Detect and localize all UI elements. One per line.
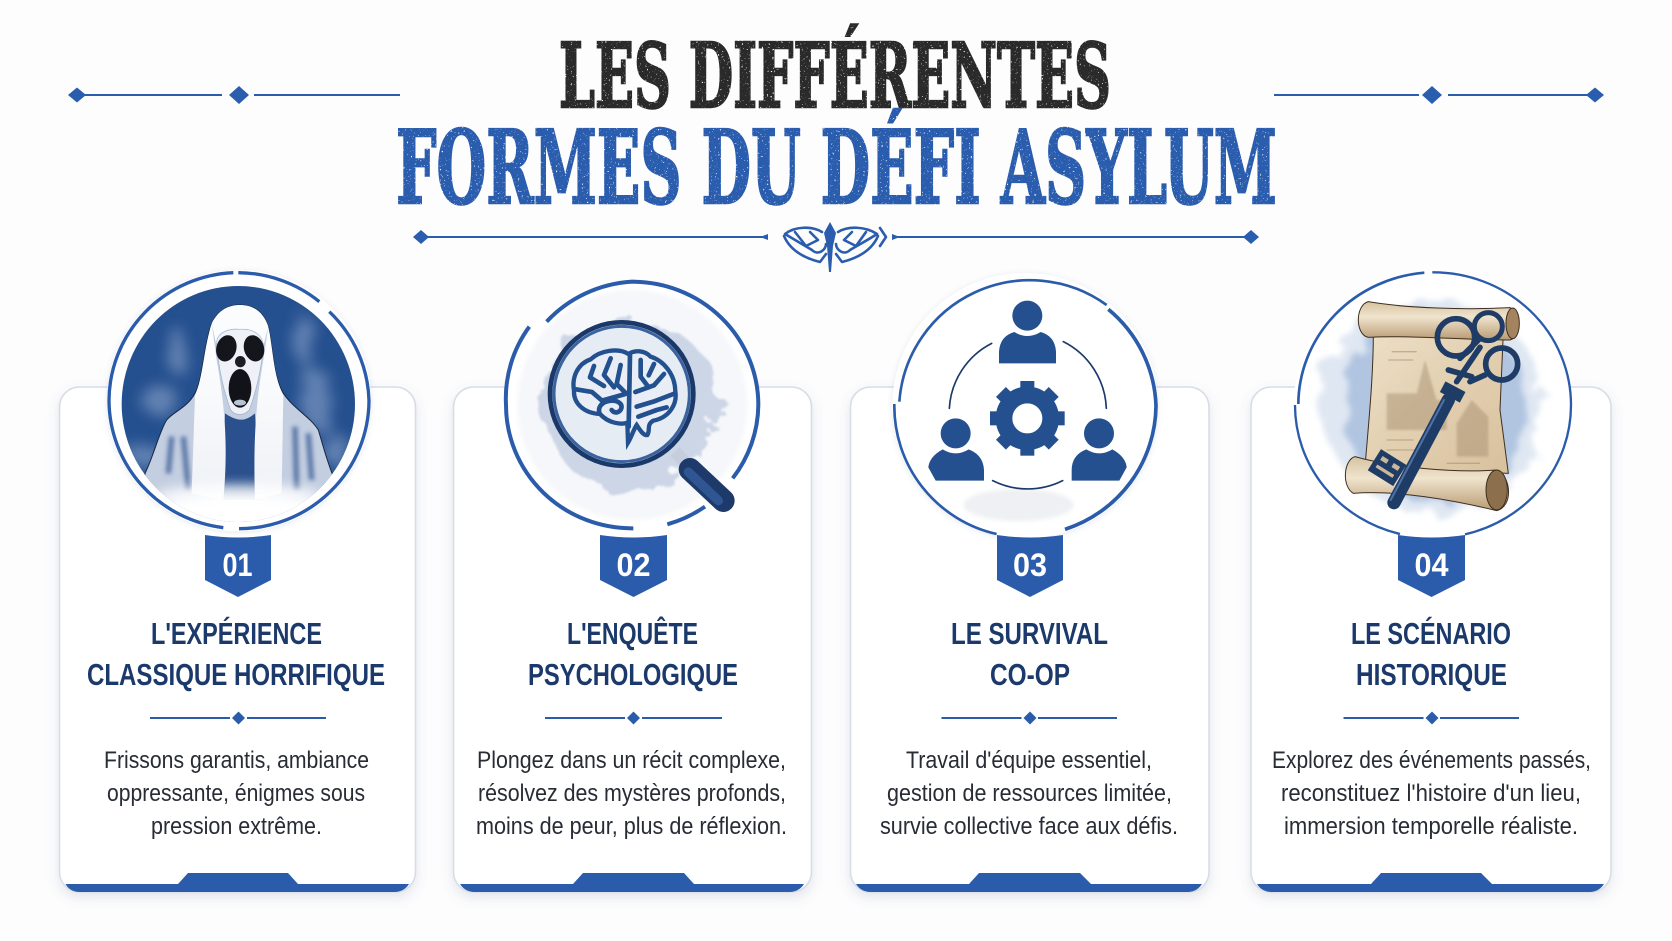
- badge 01: [205, 535, 271, 597]
- card 2: [454, 387, 812, 892]
- card 1 description: oppressante, énigmes sous: [107, 780, 365, 807]
- card 4 heading: LE SCÉNARIO: [1351, 616, 1511, 651]
- key: [1391, 313, 1518, 503]
- card 2 description: moins de peur, plus de réflexion.: [476, 813, 787, 840]
- magnifier handle: [675, 452, 723, 501]
- card 4 description: [1272, 747, 1591, 840]
- badge 01: 01: [222, 547, 252, 583]
- card 4 description: reconstituez l'histoire d'un lieu,: [1281, 780, 1581, 807]
- card 3 divider: [942, 712, 1117, 724]
- ghost sleeves: [145, 305, 333, 527]
- card 3 heading: [951, 616, 1108, 692]
- brain: [573, 350, 676, 443]
- mask: [217, 329, 263, 414]
- card 1 bottom bar: [66, 873, 409, 892]
- card 4 panel: [1251, 387, 1611, 892]
- parchment: [1345, 302, 1519, 511]
- card 1 heading: L'EXPÉRIENCE: [151, 616, 322, 651]
- badge 04: [1398, 535, 1465, 597]
- right header ornament: [1274, 86, 1604, 104]
- people: [928, 301, 1127, 481]
- card 2 description: [476, 747, 787, 840]
- icon: magnifying glass over brain medallion: [504, 280, 760, 530]
- card 4 description: Explorez des événements passés,: [1272, 747, 1591, 774]
- dark centre: [224, 414, 256, 499]
- card 4 description: immersion temporelle réaliste.: [1284, 813, 1578, 840]
- magnifier lens: [552, 325, 691, 463]
- connecting arcs: [949, 342, 1106, 489]
- card 2 description: résolvez des mystères profonds,: [478, 780, 786, 807]
- card 3 panel: [850, 387, 1209, 892]
- card 1: [60, 387, 416, 892]
- card 4 bottom bar: [1257, 873, 1604, 892]
- card 2 description: Plongez dans un récit complexe,: [477, 747, 786, 774]
- card 3: [850, 387, 1209, 892]
- sketch on parchment: [1387, 360, 1488, 457]
- card 1 description: Frissons garantis, ambiance: [104, 747, 369, 774]
- badge 03: 03: [1013, 547, 1047, 583]
- title line 1: LES DIFFÉRENTES: [559, 23, 1111, 128]
- badge 02: [600, 535, 667, 597]
- card 1 description: [104, 747, 369, 840]
- card 3 description: gestion de ressources limitée,: [887, 780, 1172, 807]
- card 4 divider: [1344, 712, 1519, 724]
- badge 02: 02: [616, 547, 650, 583]
- title: [396, 23, 1277, 227]
- icon: scroll and key medallion: [1294, 271, 1572, 539]
- icon: team around gear medallion: [892, 273, 1158, 538]
- card 3 description: [880, 747, 1178, 840]
- gear: [990, 381, 1065, 456]
- card 3 description: survie collective face aux défis.: [880, 813, 1178, 840]
- card 1 description: pression extrême.: [151, 813, 322, 840]
- card 2 divider: [545, 712, 722, 724]
- card 2 heading: PSYCHOLOGIQUE: [528, 657, 738, 692]
- card 4 heading: [1351, 616, 1511, 692]
- card 2 heading: L'ENQUÊTE: [567, 615, 698, 651]
- title divider with filigree ornament: [413, 222, 1259, 272]
- card 1 heading: [87, 616, 385, 692]
- card 3 description: Travail d'équipe essentiel,: [906, 747, 1152, 774]
- card 2 heading: [528, 615, 738, 692]
- card 1 panel: [60, 387, 416, 892]
- left header ornament: [68, 86, 400, 104]
- badge 03: [997, 535, 1063, 597]
- card 2 bottom bar: [460, 873, 804, 892]
- white drapes: [192, 323, 226, 500]
- card 2 panel: [454, 387, 812, 892]
- badge 04: 04: [1414, 547, 1449, 583]
- card 4: [1251, 387, 1611, 892]
- card 3 heading: LE SURVIVAL: [951, 616, 1108, 651]
- card 1 divider: [150, 712, 326, 724]
- card 3 bottom bar: [856, 873, 1202, 892]
- card 4 heading: HISTORIQUE: [1356, 657, 1507, 692]
- card 3 heading: CO-OP: [990, 657, 1070, 692]
- icon: screaming ghost medallion: [107, 270, 371, 540]
- card 1 heading: CLASSIQUE HORRIFIQUE: [87, 657, 385, 692]
